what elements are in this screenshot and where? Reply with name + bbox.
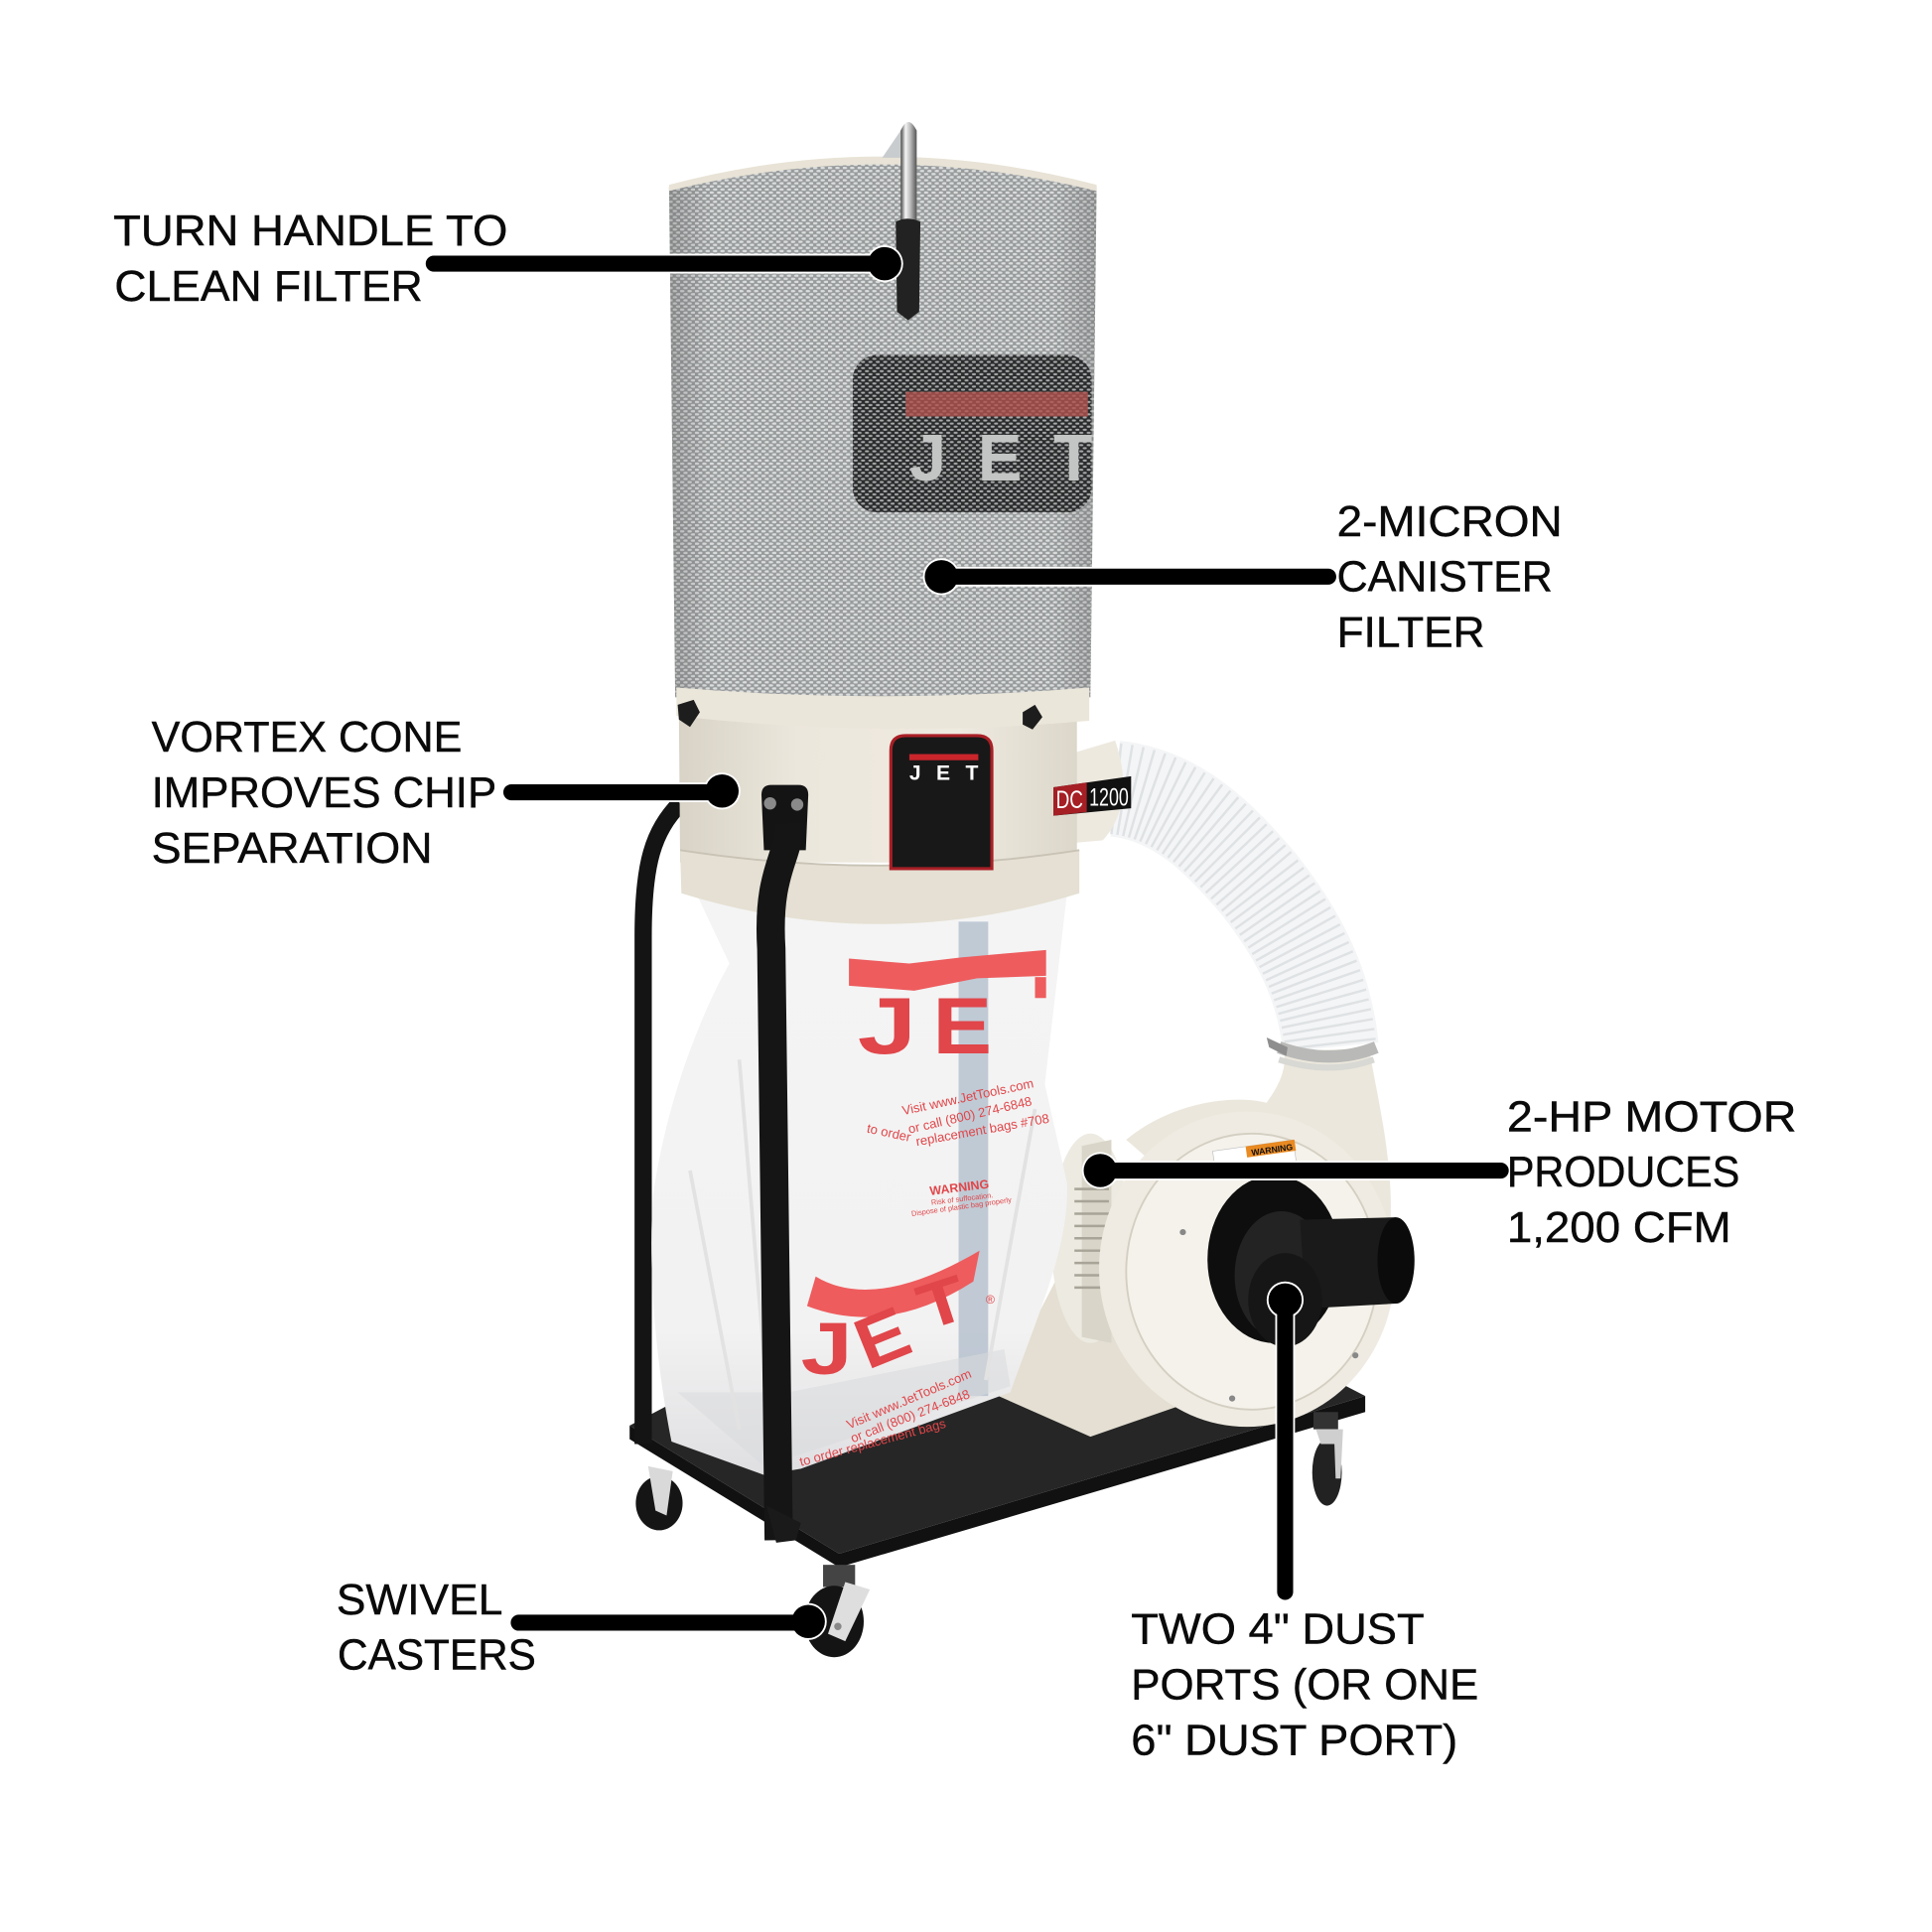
JET label on drum xyxy=(891,736,992,869)
left stand tube xyxy=(643,803,680,1445)
DC 1200 badge: 1200 xyxy=(1089,785,1129,812)
DC 1200 badge: DC xyxy=(1056,787,1083,814)
warning label xyxy=(1212,1140,1298,1173)
callout line: motor xyxy=(1082,1152,1501,1189)
label: vortex cone: VORTEX CONE xyxy=(152,714,462,761)
bag text top: to order xyxy=(866,1121,912,1145)
bag text top xyxy=(866,1075,1050,1149)
callout line: dust ports xyxy=(1267,1282,1304,1591)
JET logo on filter xyxy=(853,354,1094,512)
collar knob left xyxy=(678,700,700,727)
label: swivel casters: SWIVEL xyxy=(337,1577,502,1624)
label: swivel casters xyxy=(337,1577,536,1680)
bag logo bottom: E xyxy=(844,1292,921,1385)
bag text top: Visit www.JetTools.com xyxy=(900,1075,1035,1118)
bag logo top: E xyxy=(932,982,992,1071)
label: motor: 1,200 CFM xyxy=(1507,1204,1731,1252)
bag warning: Risk of suffocation. xyxy=(930,1190,994,1207)
canister filter mesh xyxy=(669,157,1097,705)
dust drum body xyxy=(676,688,1089,924)
warning label: WARNING xyxy=(1251,1142,1294,1158)
filter collar ring xyxy=(676,688,1089,729)
mobile base platform xyxy=(629,1368,1365,1568)
label: motor: PRODUCES xyxy=(1507,1149,1739,1196)
JET logo on filter: JET xyxy=(909,421,1094,495)
bag text top: replacement bags #708 xyxy=(914,1111,1050,1149)
collar knob right xyxy=(1023,705,1042,730)
bag logo bottom: T xyxy=(908,1262,975,1344)
inlet neck xyxy=(1045,741,1123,844)
drum lower band xyxy=(680,850,1079,924)
bag text bottom: or call (800) 274-6848 xyxy=(849,1386,972,1446)
JET label on drum: JET xyxy=(909,762,979,785)
bag logo bottom: J xyxy=(801,1308,853,1390)
left rear swivel caster xyxy=(635,1466,683,1530)
right rear caster xyxy=(1312,1412,1343,1506)
bag logo bottom xyxy=(801,1251,995,1390)
bag text bottom: to order replacement bags xyxy=(798,1416,948,1469)
label: vortex cone: SEPARATION xyxy=(152,825,433,873)
bag logo top: J xyxy=(858,982,916,1071)
flexible hose xyxy=(1115,788,1376,1067)
blower mount bracket xyxy=(996,1273,1182,1437)
callout line: swivel casters xyxy=(518,1603,827,1640)
motor xyxy=(1051,1134,1130,1343)
blower housing xyxy=(1099,1048,1395,1427)
label: turn handle: CLEAN FILTER xyxy=(114,263,423,311)
callout line: vortex cone xyxy=(511,772,741,809)
label: dust ports: TWO 4" DUST xyxy=(1131,1606,1425,1654)
bag logo top xyxy=(849,950,1046,1071)
label: motor xyxy=(1507,1093,1796,1252)
callout line: canister filter xyxy=(923,558,1328,595)
bag text bottom xyxy=(798,1366,974,1469)
bag warning: Dispose of plastic bag properly xyxy=(910,1195,1013,1218)
DC 1200 badge xyxy=(1053,776,1131,816)
label: vortex cone xyxy=(152,714,496,873)
label: motor: 2-HP MOTOR xyxy=(1507,1093,1796,1141)
label: canister filter: CANISTER xyxy=(1337,554,1553,602)
label: dust ports: PORTS (OR ONE xyxy=(1131,1661,1478,1709)
front stand tube xyxy=(761,785,808,1543)
front swivel caster xyxy=(804,1565,870,1657)
label: canister filter xyxy=(1337,498,1563,657)
collection bag xyxy=(651,894,1067,1475)
filter handle xyxy=(883,122,920,321)
label: vortex cone: IMPROVES CHIP xyxy=(152,769,496,817)
label: swivel casters: CASTERS xyxy=(338,1632,536,1680)
callout line: filter handle xyxy=(434,245,903,282)
filter top rim xyxy=(669,157,1097,191)
label: dust ports: 6" DUST PORT) xyxy=(1131,1717,1457,1764)
label: turn handle xyxy=(113,207,507,311)
bag text top: or call (800) 274-6848 xyxy=(906,1093,1034,1137)
label: canister filter: FILTER xyxy=(1337,610,1484,657)
black dust port fitting xyxy=(1207,1175,1415,1346)
label: dust ports xyxy=(1131,1606,1478,1764)
label: canister filter: 2-MICRON xyxy=(1337,498,1563,546)
bag logo bottom: ® xyxy=(986,1293,995,1307)
label: turn handle: TURN HANDLE TO xyxy=(113,207,507,255)
bag warning xyxy=(910,1177,1013,1218)
hose clamp xyxy=(1267,1037,1288,1056)
infographic canvas xyxy=(113,122,1795,1764)
bag warning: WARNING xyxy=(929,1177,990,1198)
bag text bottom: Visit www.JetTools.com xyxy=(844,1366,974,1432)
